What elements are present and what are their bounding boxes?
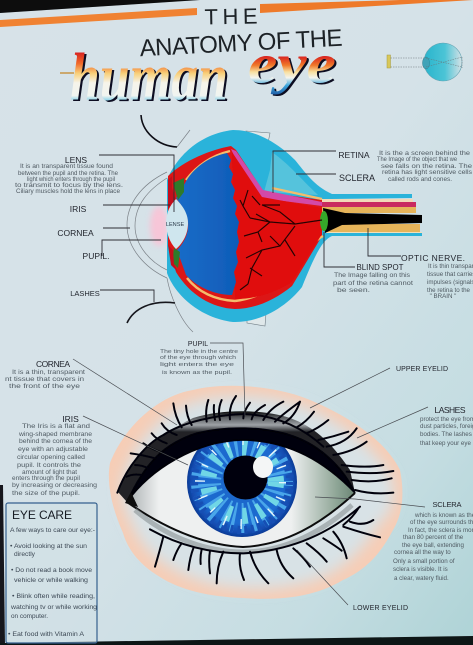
text: pupil description: The tiny hole in the centre xyxy=(160,349,238,355)
text: lashes description: that keep your eye xyxy=(420,440,471,447)
text: blind spot description xyxy=(333,272,413,294)
choroid xyxy=(168,146,322,309)
retina pink band xyxy=(231,149,322,206)
eye muscle top xyxy=(246,131,270,143)
text: iris description: wing-shaped membrane xyxy=(18,431,93,438)
text: sclera description: cornea all the way to xyxy=(394,549,451,556)
upper eyelid lash xyxy=(141,115,177,147)
title: human eye script: human xyxy=(72,40,230,116)
vitreous humour xyxy=(176,153,239,295)
text: lashes description: bodies. The lashes xyxy=(420,431,472,438)
upper lashes xyxy=(117,396,393,493)
illustration: large eye xyxy=(109,386,402,599)
iris xyxy=(187,440,297,537)
text: cornea description: It is a thin, transparent xyxy=(12,369,85,376)
label: upper eyelid: UPPER EYELID xyxy=(396,366,448,373)
label: lashes: LASHES xyxy=(70,289,100,298)
peach halo xyxy=(109,386,402,599)
text: lens description: between the pupil and the retina. The xyxy=(18,170,119,177)
lens label: LENSE xyxy=(166,222,184,228)
text: sclera description xyxy=(393,512,473,582)
label: pupil: PUPIL xyxy=(188,341,208,348)
eye care tips: • Eat food with Vitamin A xyxy=(8,631,85,638)
lens xyxy=(166,199,188,249)
diagram: cross-section of the eye xyxy=(127,115,422,332)
text: iris description: amount of light that xyxy=(22,469,77,476)
header band: orange marker stripes xyxy=(0,0,473,27)
eye care tips: on computer. xyxy=(11,613,48,620)
icon: small eye ray diagram xyxy=(387,43,462,81)
text: retina description: retina has light sensitive cells xyxy=(382,169,472,176)
eye care tips: A few ways to care our eye:- xyxy=(10,527,95,534)
panel: eye care xyxy=(6,503,97,643)
title: THE xyxy=(204,4,258,29)
text: iris description xyxy=(12,423,98,497)
large eye leader lines xyxy=(73,343,428,605)
blood vessels xyxy=(240,190,322,290)
eye care tips: directly xyxy=(14,551,36,558)
label: lashes: LASHES xyxy=(434,405,466,415)
yellow layer xyxy=(186,151,323,301)
text: sclera description: than 80 percent of the xyxy=(403,534,464,541)
text: lens description: to transmit to focus by the lens. xyxy=(15,182,123,189)
iris red top xyxy=(168,176,177,208)
text: pupil description xyxy=(160,349,238,376)
text: sclera description: the eye ball, extending xyxy=(402,542,464,549)
label: optic nerve: OPTIC NERVE. xyxy=(401,253,465,263)
eye white xyxy=(127,440,355,547)
blind spot xyxy=(320,211,328,231)
text: lashes description xyxy=(420,416,473,447)
title: human eye script: eye xyxy=(248,34,336,96)
optic nerve layers xyxy=(322,199,422,233)
retina red interior xyxy=(232,152,322,299)
eye care tips: vehicle or while walking xyxy=(14,577,88,584)
text: pupil description: light enters the eye xyxy=(160,362,234,368)
eyelid shadow band xyxy=(118,411,355,502)
text: cornea description: the front of the eye xyxy=(9,383,81,390)
text: retina description: The Image of the object that we xyxy=(377,156,458,163)
lower eyelid lash xyxy=(127,302,175,323)
title: human eye script: human xyxy=(70,38,228,114)
text: lens description: It is an transparent tissue found xyxy=(20,163,114,170)
diagram labels and leaders xyxy=(15,150,473,302)
text: retina description: see falls on the retina. The xyxy=(381,163,473,170)
text: iris description: eye with an adjustable xyxy=(18,446,89,453)
label: cornea: CORNEA xyxy=(36,359,70,369)
highlight xyxy=(253,456,273,478)
leader lines xyxy=(99,151,401,302)
halo interior fade xyxy=(121,396,394,589)
label: iris: IRIS xyxy=(62,414,79,424)
text: pupil description: of the eye through which xyxy=(160,355,236,361)
label: sclera: SCLERA xyxy=(339,173,375,183)
sclera xyxy=(167,130,422,322)
eye muscle bottom xyxy=(247,313,266,326)
text: cornea description: nt tissue that covers in xyxy=(5,376,85,383)
heading: eye care: EYE CARE xyxy=(12,508,72,522)
eye care tips: • Avoid looking at the sun xyxy=(10,543,87,550)
text: sclera description: Only a small portion of xyxy=(393,558,455,565)
label: sclera: SCLERA xyxy=(432,500,462,509)
title: ANATOMY OF THE xyxy=(139,25,343,62)
text: optic nerve description: " BRAIN " xyxy=(430,293,456,300)
text: iris description: The Iris is a flat and xyxy=(22,423,91,430)
ciliary body bottom xyxy=(172,248,180,268)
label: iris: IRIS xyxy=(70,204,87,214)
eye outline and upper lid xyxy=(127,428,355,502)
text: lens description: light which enters through the pupil xyxy=(27,176,115,183)
pupil xyxy=(224,456,268,500)
label: cornea: CORNEA xyxy=(57,228,94,238)
eye care tips: watching tv or while working xyxy=(10,604,97,611)
title: human eye script: eye xyxy=(250,35,338,97)
text: blind spot description: part of the retina cannot xyxy=(333,280,413,287)
cornea and eyelid outlines xyxy=(127,130,193,332)
iris red bottom xyxy=(168,245,178,272)
title xyxy=(139,4,343,62)
text: iris description: pupil. It controls the xyxy=(17,462,82,469)
label: retina: RETINA xyxy=(338,150,370,160)
label: lens: LENS xyxy=(65,155,87,165)
text: blind spot description: The Image falling on this xyxy=(334,272,410,279)
text: sclera description: sclera is visible. It is xyxy=(393,566,448,573)
text: retina description xyxy=(377,150,473,183)
text: lens description: Ciliary muscles hold the lens in place xyxy=(16,188,121,195)
title: human eye script xyxy=(60,34,338,116)
large eye labels xyxy=(5,341,473,612)
text: blind spot description: be seen. xyxy=(337,287,370,294)
text: optic nerve description: the retina to the xyxy=(427,287,471,294)
optic nerve xyxy=(323,208,422,233)
eye care tips xyxy=(8,527,97,638)
text: retina description: It is the a screen behind the xyxy=(379,150,471,157)
label: blind spot: BLIND SPOT xyxy=(356,262,404,272)
text: pupil description: is known as the pupil. xyxy=(162,370,232,376)
label: lower eyelid: LOWER EYELID xyxy=(353,605,408,612)
text: iris description: circular opening called xyxy=(17,454,86,461)
text: iris description: behind the cornea of the xyxy=(19,438,93,445)
text: iris description: enters through the pupil xyxy=(12,475,80,482)
lower lashes xyxy=(150,507,380,583)
eye care tips: • Do not read a book move xyxy=(11,567,92,574)
eyelashes xyxy=(117,396,393,583)
text: optic nerve description xyxy=(427,263,473,300)
ciliary body top xyxy=(173,178,184,200)
text: iris description: the size of the pupil. xyxy=(12,490,80,497)
text: lens description xyxy=(15,163,123,195)
eye care tips: • Blink often while reading, xyxy=(12,593,95,600)
text: retina description: called rods and cones. xyxy=(388,176,452,183)
pink cornea tint xyxy=(150,206,168,246)
label: pupil: PUPIL. xyxy=(83,251,109,261)
text: sclera description: a clear, watery fluid. xyxy=(394,575,449,582)
text: iris description: by increasing or decreasing xyxy=(12,482,98,489)
text: cornea description xyxy=(5,369,85,390)
